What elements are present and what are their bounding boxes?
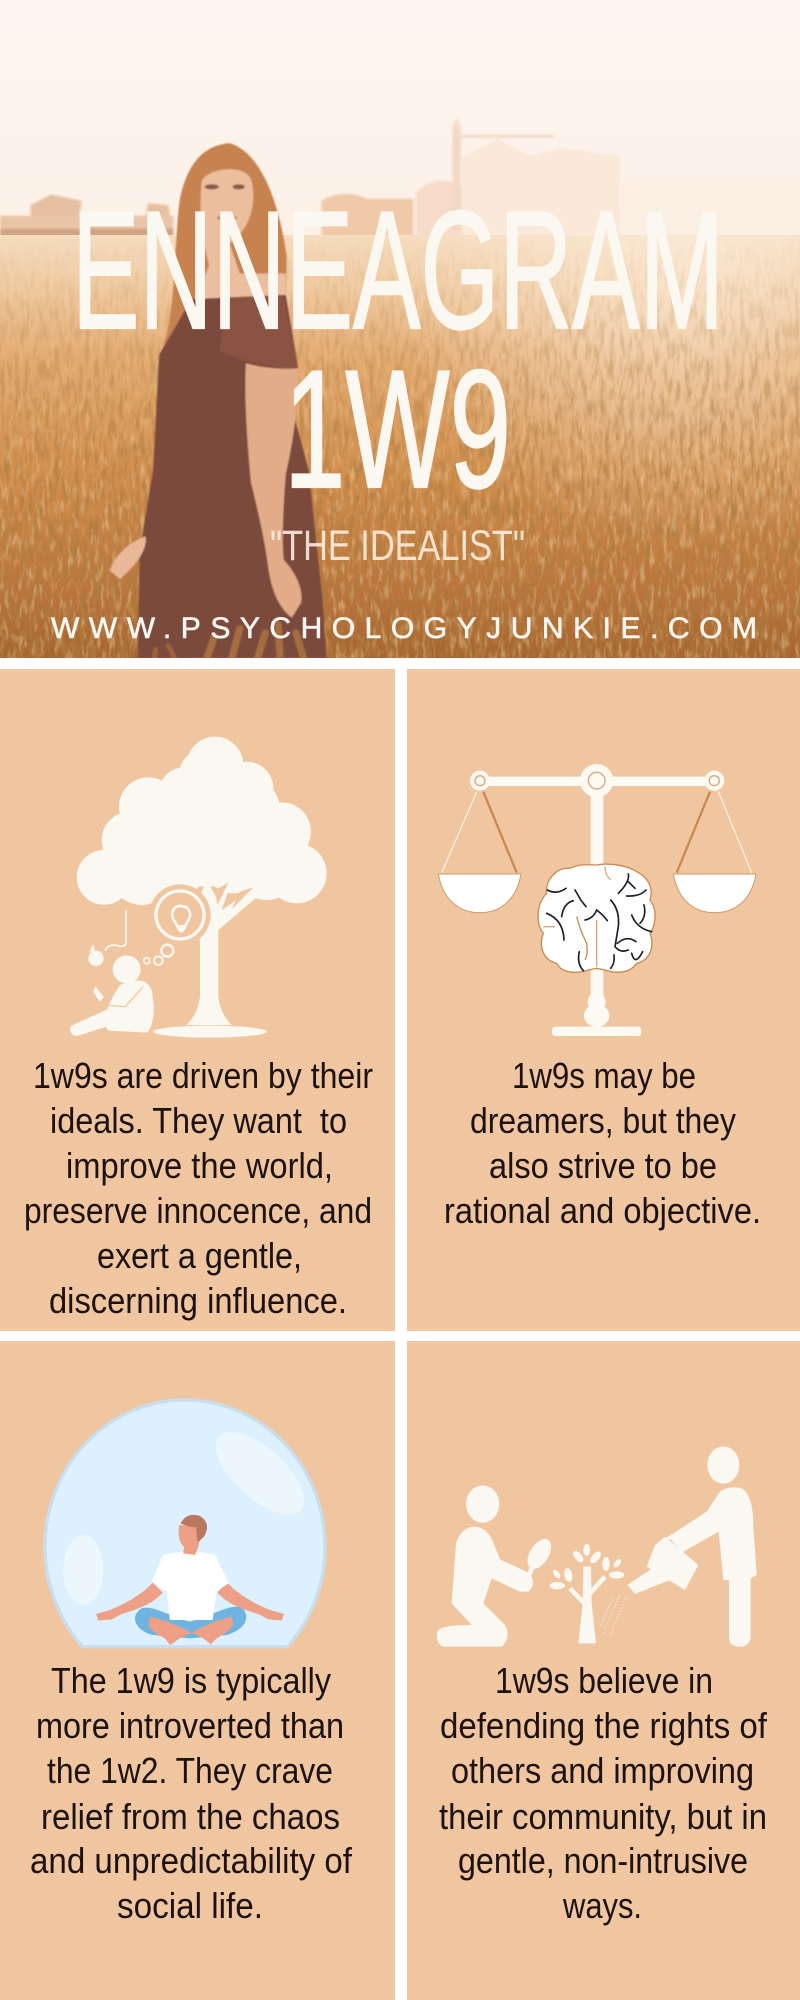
panel: introverted xyxy=(0,1341,395,2000)
thought bubbles xyxy=(144,945,173,965)
woman xyxy=(110,143,327,667)
seated person xyxy=(70,955,154,1036)
distant farm with silos xyxy=(0,118,620,235)
text: rational xyxy=(444,1055,761,1231)
face and chest xyxy=(194,169,286,303)
pivot rings xyxy=(475,772,719,789)
text: rational: rational and objective. xyxy=(444,1190,761,1231)
text: ideals: preserve innocence, and xyxy=(24,1190,372,1231)
icon: two people tending a sapling xyxy=(437,1446,757,1647)
head and hair xyxy=(179,1525,202,1555)
dress xyxy=(138,295,327,658)
hair xyxy=(163,142,288,347)
text: community: gentle, non-intrusive xyxy=(458,1840,748,1881)
left pan with cords xyxy=(438,792,521,913)
brain xyxy=(538,864,655,972)
text: introverted: the 1w2. They crave xyxy=(47,1750,333,1791)
text: community xyxy=(439,1660,768,1926)
text: ideals xyxy=(24,1055,373,1321)
icon: person reading under tree xyxy=(70,737,327,1038)
text: rational: dreamers, but they xyxy=(470,1100,736,1141)
tree trunk and branches xyxy=(153,880,267,1038)
idea bulb in ring xyxy=(149,884,211,946)
text: introverted xyxy=(30,1660,353,1926)
text: ideals: exert a gentle, xyxy=(97,1235,302,1276)
text: ideals: 1w9s are driven by their xyxy=(33,1055,373,1096)
foreground wheat xyxy=(152,620,308,658)
text: ideals: ideals. They want to xyxy=(50,1100,347,1141)
panel: rational and objective xyxy=(407,669,800,1331)
panel: driven by ideals xyxy=(0,669,395,1331)
meditating person xyxy=(96,1515,284,1645)
text: introverted: The 1w9 is typically xyxy=(51,1660,331,1701)
wheat field xyxy=(0,235,800,658)
bubble xyxy=(45,1400,325,1647)
icon: person meditating in bubble xyxy=(45,1400,325,1647)
arms xyxy=(96,1583,284,1621)
text: community: 1w9s believe in xyxy=(495,1660,713,1701)
text: introverted: and unpredictability of xyxy=(30,1840,353,1881)
arm and hands xyxy=(245,363,302,618)
title: 1W9: 1W9 xyxy=(284,335,511,523)
text: community: others and improving xyxy=(451,1750,754,1791)
tree canopy xyxy=(77,737,327,905)
text: ideals: discerning influence. xyxy=(49,1280,347,1321)
text: community: ways. xyxy=(562,1885,642,1926)
text: introverted: social life. xyxy=(117,1885,263,1926)
kneeling person with trowel xyxy=(437,1485,556,1647)
icon: scale with brain xyxy=(438,764,756,1036)
text: community: their community, but in xyxy=(439,1796,767,1837)
text: community: defending the rights of xyxy=(440,1705,768,1746)
sky xyxy=(0,0,800,240)
legs xyxy=(135,1607,246,1638)
hero photo: woman in wheat field xyxy=(0,0,800,667)
text: rational: also strive to be xyxy=(489,1145,717,1186)
panel: improving community xyxy=(407,1341,800,2000)
subtitle: "THE IDEALIST" xyxy=(270,522,525,570)
website url: WWW.PSYCHOLOGYJUNKIE.COM xyxy=(51,612,757,645)
text: rational: 1w9s may be xyxy=(512,1055,696,1096)
text: introverted: more introverted than xyxy=(36,1705,344,1746)
right pan with cords xyxy=(673,792,756,913)
sapling xyxy=(550,1544,624,1643)
water drops xyxy=(600,1595,627,1637)
scale beam and stand xyxy=(470,764,724,1036)
text: ideals: improve the world, xyxy=(66,1145,333,1186)
person with watering can xyxy=(627,1446,757,1647)
shirt xyxy=(152,1552,229,1620)
hanging apple xyxy=(88,910,126,966)
text: introverted: relief from the chaos xyxy=(41,1796,340,1837)
